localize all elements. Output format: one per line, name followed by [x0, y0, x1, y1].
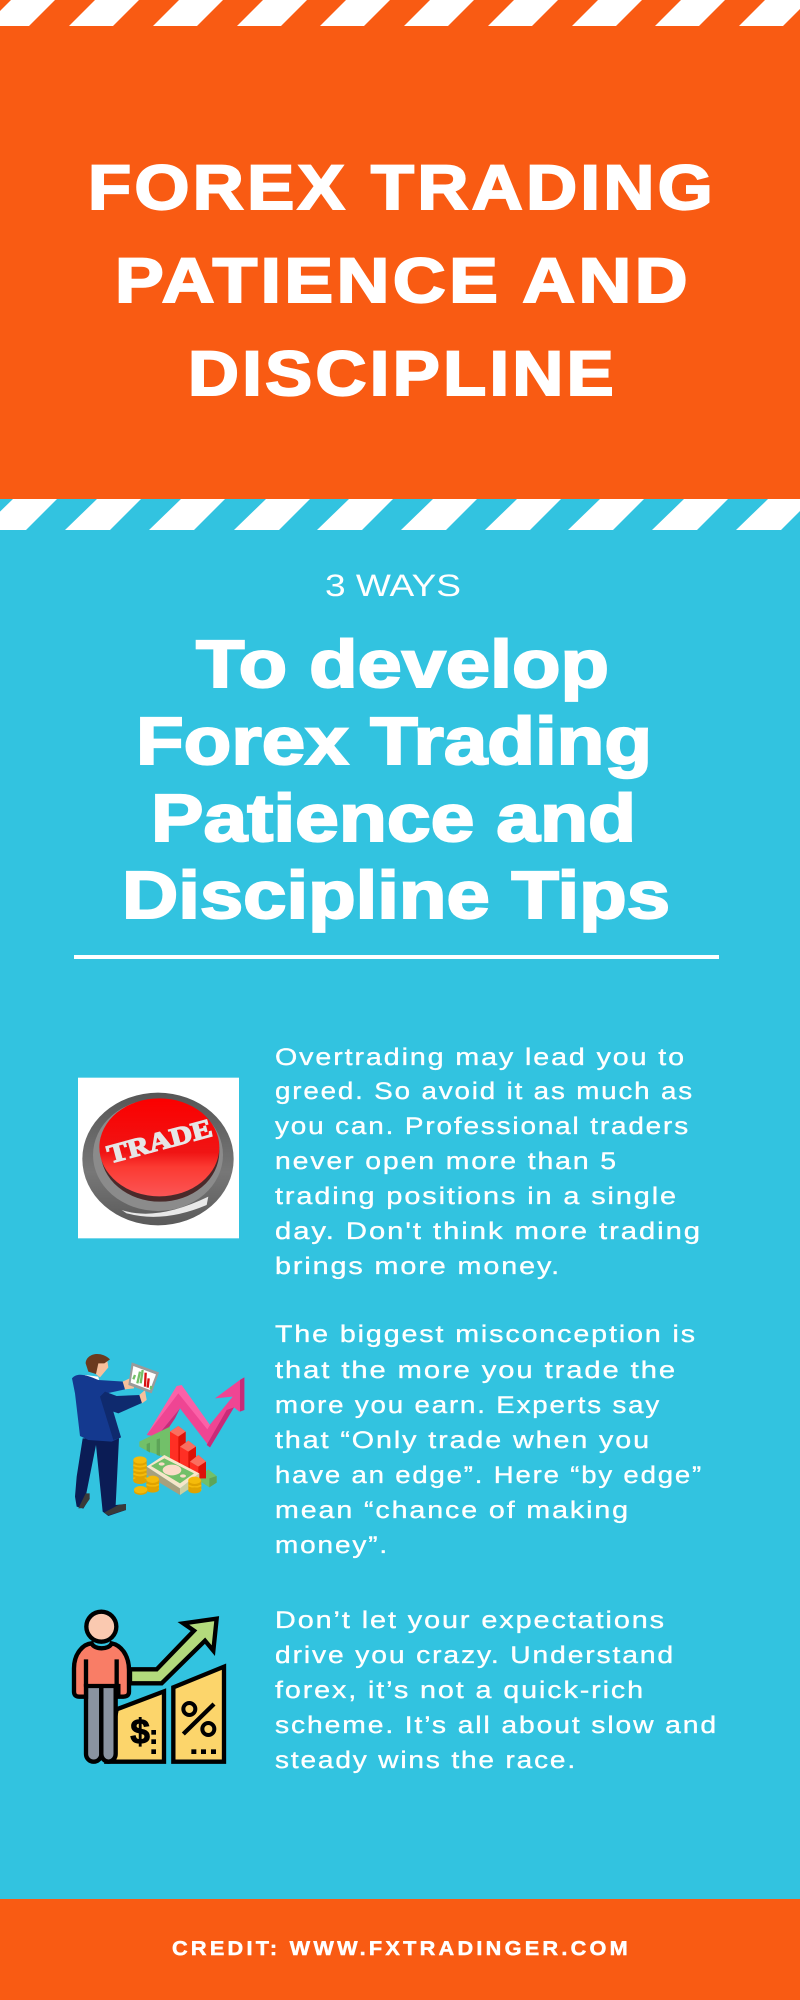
text block: overtrading: day. Don't think more trading	[275, 1218, 702, 1245]
title	[88, 153, 716, 409]
heading	[122, 627, 670, 933]
text block: overtrading: Overtrading may lead you to	[275, 1044, 686, 1071]
panel: orange title banner	[0, 0, 800, 499]
heading: Discipline Tips	[122, 858, 670, 933]
heading underline	[74, 955, 719, 959]
green blocks	[139, 1427, 217, 1487]
text block: misconception	[275, 1321, 703, 1559]
text block: expectations: forex, it’s not a quick-rich	[275, 1677, 645, 1704]
red bars	[170, 1426, 206, 1478]
subheading: 3 ways: 3 WAYS	[325, 568, 461, 603]
divider hazard stripes	[0, 499, 800, 530]
title: DISCIPLINE	[188, 339, 617, 409]
text block: misconception: that “Only trade when you	[275, 1427, 651, 1454]
person legs	[86, 1685, 116, 1762]
footer credit: CREDIT: WWW.FXTRADINGER.COM	[172, 1938, 631, 1960]
person head	[86, 1612, 116, 1642]
text block: expectations: drive you crazy. Understand	[275, 1642, 675, 1669]
text block: expectations: steady wins the race.	[275, 1747, 577, 1774]
text block: misconception: The biggest misconception is	[275, 1321, 697, 1348]
text block: misconception: mean “chance of making	[275, 1497, 630, 1524]
panel: orange footer	[0, 1899, 800, 2000]
dollar bar: $	[130, 1712, 150, 1751]
text block: expectations: Don’t let your expectations	[275, 1607, 666, 1634]
icon: person with growth arrow and charts	[74, 1612, 224, 1762]
inner arm lines	[86, 1659, 117, 1687]
text block: misconception: have an edge”. Here “by edge”	[275, 1462, 703, 1489]
text block: overtrading	[275, 1044, 702, 1280]
text block: misconception: that the more you trade the	[275, 1357, 677, 1384]
dollar bar	[107, 1691, 164, 1762]
title: PATIENCE AND	[115, 246, 691, 316]
top hazard stripes	[0, 0, 800, 26]
text block: misconception: money”.	[275, 1532, 389, 1559]
text block: misconception: more you earn. Experts say	[275, 1392, 661, 1419]
text block: overtrading: trading positions in a single	[275, 1183, 678, 1210]
icon: businessman with tablet and rising chart	[72, 1354, 244, 1516]
pink rising arrow	[147, 1377, 244, 1447]
text block: overtrading: greed. So avoid it as much as	[275, 1078, 694, 1105]
text block: overtrading: you can. Professional traders	[275, 1113, 690, 1140]
title: FOREX TRADING	[88, 153, 716, 223]
man in blue suit	[72, 1354, 147, 1516]
icon: red trade button: TRADE	[104, 1113, 215, 1169]
tablet with bar chart	[128, 1362, 159, 1393]
heading: Patience and	[151, 781, 636, 856]
text block: overtrading: never open more than 5	[275, 1148, 618, 1175]
person torso	[74, 1643, 129, 1697]
banknotes	[147, 1455, 199, 1495]
gold coins	[133, 1456, 201, 1495]
text block: expectations	[275, 1607, 718, 1774]
heading: Forex Trading	[136, 704, 652, 779]
text block: expectations: scheme. It’s all about slow and	[275, 1712, 718, 1739]
green growth arrow	[130, 1619, 217, 1683]
text block: overtrading: brings more money.	[275, 1253, 561, 1280]
icon: red trade button	[78, 1078, 239, 1238]
percent bar	[173, 1667, 224, 1762]
heading: To develop	[196, 627, 609, 702]
